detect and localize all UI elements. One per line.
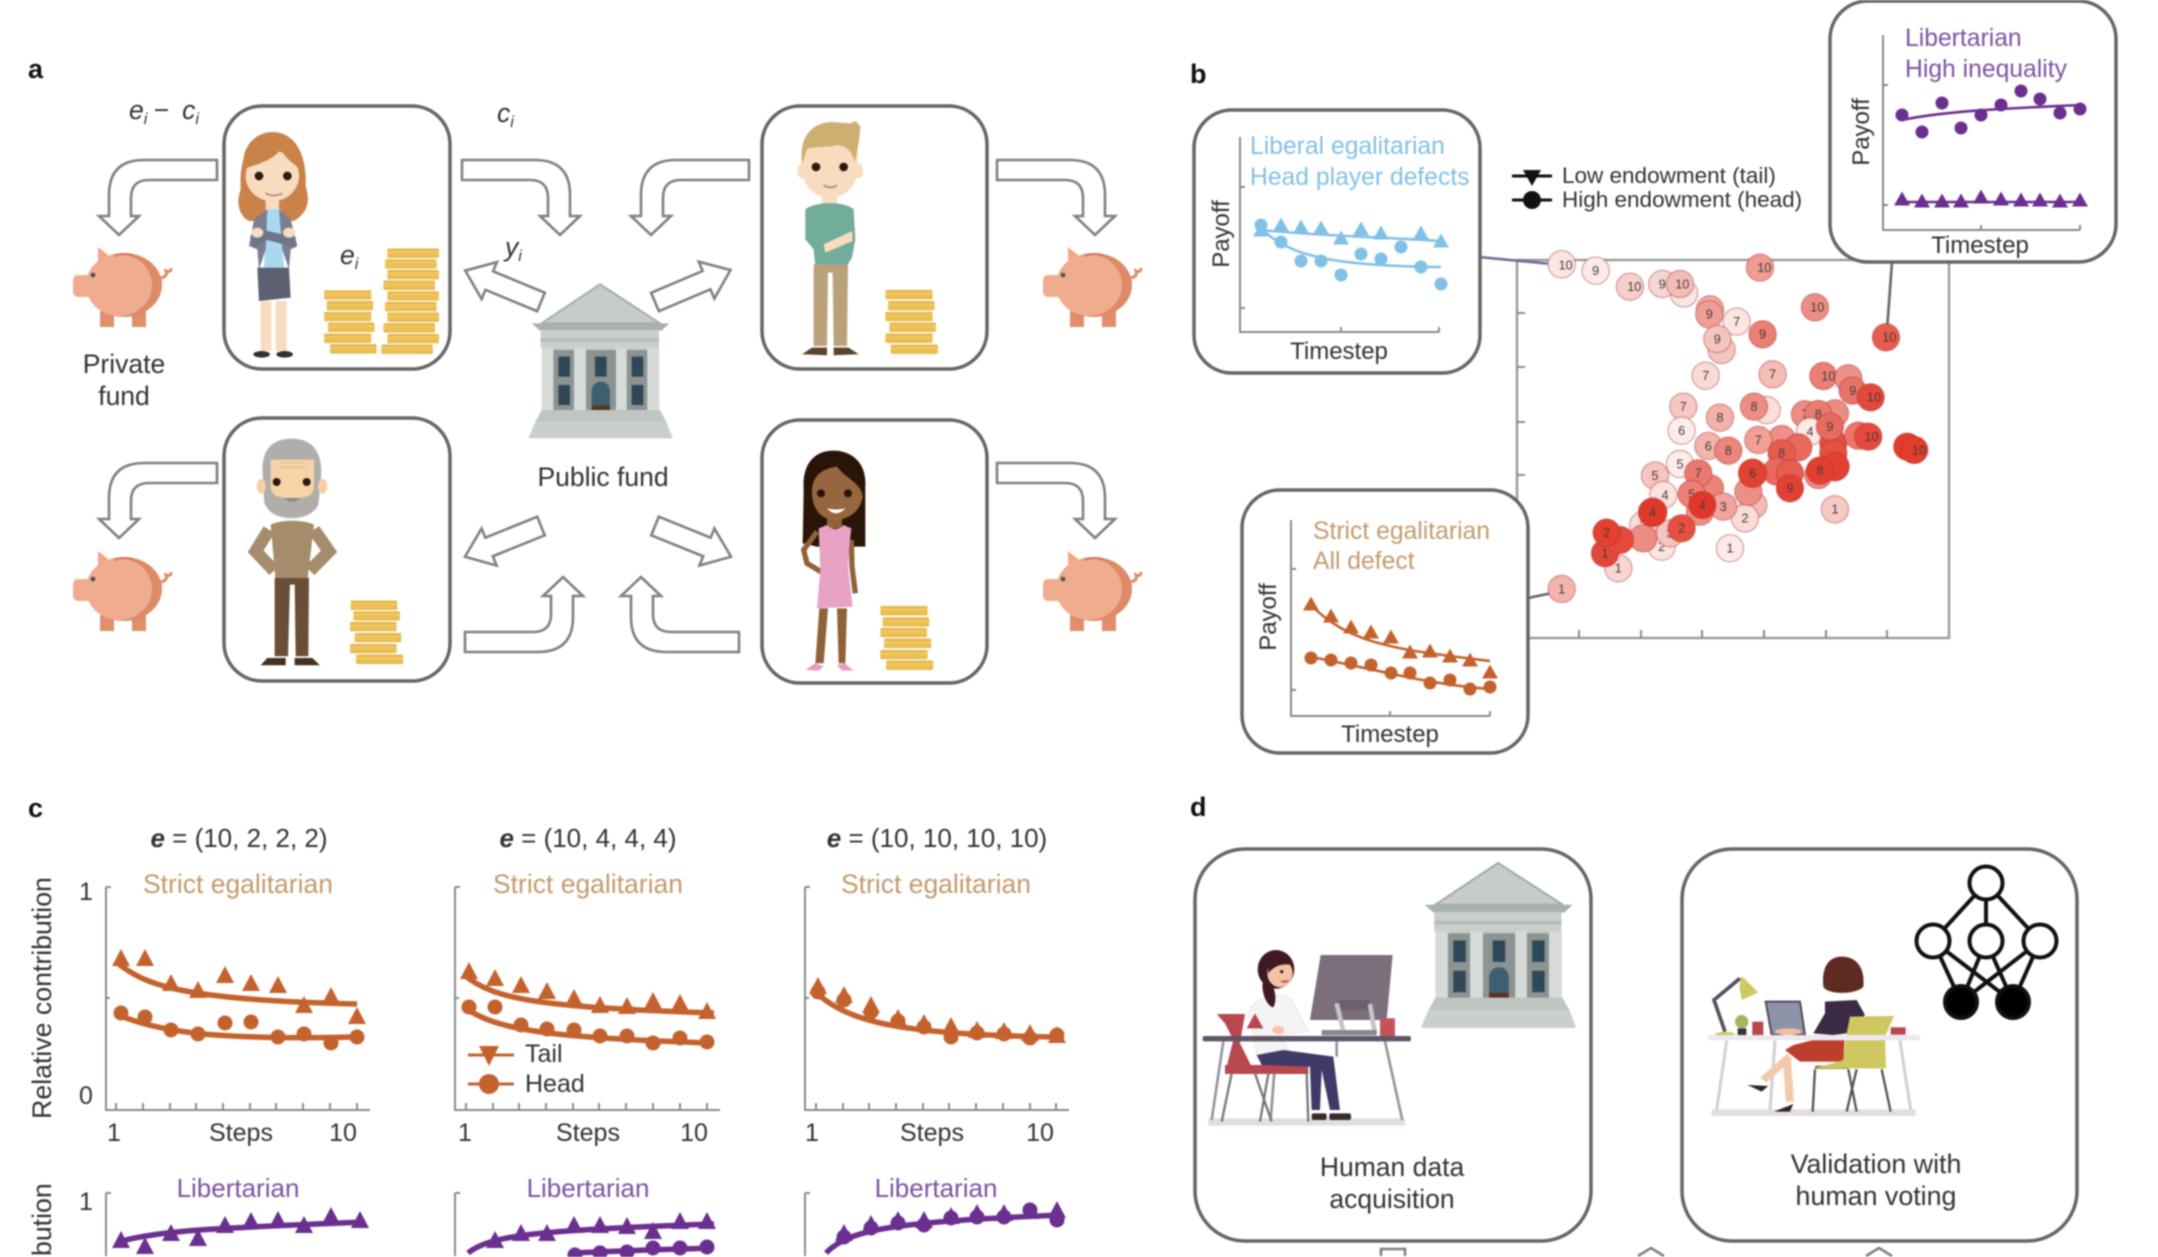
arrow: young woman to private fund [997, 463, 1115, 538]
connector lines [1479, 257, 1892, 598]
y axis label: row 2, cropped: bution [27, 1183, 57, 1256]
chart: strict egalitarian, e 10 2 2 2: Steps [209, 1119, 273, 1147]
coins: young woman [880, 606, 933, 670]
arrow: public fund to woman [458, 252, 549, 320]
scatter points: 9 [1759, 328, 1766, 342]
arrow tip: up to validation right [1866, 1248, 1892, 1256]
legend: endowment: Low endowment (tail) [1562, 163, 1776, 188]
panel d: workflow [1190, 792, 2077, 1256]
scatter points: 8 [1716, 411, 1724, 425]
inset: libertarian high inequality [1830, 1, 2116, 262]
scatter points: 6 [1678, 424, 1685, 438]
scatter points: 9 [1786, 482, 1793, 496]
icon: neural network [1916, 866, 2056, 1018]
inset: strict egalitarian all defect: Timestep [1341, 721, 1439, 748]
piggy bank: bottom left [73, 551, 171, 631]
piggy bank: top right [1043, 247, 1141, 327]
coins: woman low stack [324, 290, 377, 354]
scatter points: 4 [1806, 425, 1813, 439]
y axis label: row 1: Relative contribution [27, 877, 57, 1119]
chart: strict egalitarian, e 10 10 10 10 [805, 869, 1069, 1147]
scatter points: 7 [1801, 408, 1808, 422]
scatter points: 5 [1651, 469, 1659, 483]
legend: endowment: High endowment (head) [1562, 187, 1802, 212]
label: e minus c: i [144, 111, 148, 128]
scatter points: 2 [1678, 522, 1685, 536]
scatter points: 10 [1675, 277, 1689, 291]
chart: strict egalitarian, e 10 2 2 2 [79, 869, 370, 1147]
scatter points: 7 [1702, 369, 1709, 383]
label: e minus c: i [195, 111, 199, 128]
scatter points: 8 [1778, 447, 1785, 461]
scatter points: 1 [1831, 503, 1838, 517]
heading: a: a [28, 54, 44, 84]
chart: strict egalitarian, e 10 10 10 10: Steps [900, 1119, 964, 1147]
player box: young woman [762, 420, 987, 683]
coins: old man [350, 601, 403, 664]
inset: liberal egalitarian: Payoff [1208, 200, 1235, 268]
arrow: woman to public fund [462, 160, 580, 235]
label: e: e [340, 240, 355, 270]
scatter points: 1 [1726, 542, 1734, 556]
chart: strict egalitarian, e 10 10 10 10: 10 [1026, 1119, 1054, 1147]
scatter points: 10 [1912, 443, 1926, 457]
caption: validation with human voting: human voting [1796, 1181, 1956, 1211]
label: y: i [518, 248, 522, 265]
label: e minus c: e [129, 95, 144, 125]
caption: human data acquisition: Human data [1320, 1152, 1464, 1182]
title: e 10 2 2 2: e = (10, 2, 2, 2) [150, 823, 328, 853]
label: public fund: Public fund [537, 462, 669, 492]
arrow: public fund to old man [457, 507, 548, 575]
caption: human data acquisition: acquisition [1329, 1184, 1455, 1214]
character: woman [238, 132, 308, 358]
label: c: i [510, 114, 514, 131]
arrow: public fund to young woman [648, 507, 739, 575]
scatter points: 8 [1750, 400, 1757, 414]
chart: strict egalitarian, e 10 4 4 4 [455, 869, 720, 1147]
arrow: woman to private fund [99, 160, 217, 235]
scatter points [1548, 251, 1928, 603]
legend: endowment [1512, 163, 1802, 212]
title: e 10 4 4 4: e = (10, 4, 4, 4) [499, 823, 677, 853]
arrow: young woman to public fund [621, 577, 739, 652]
title: e 10 10 10 10: e = (10, 10, 10, 10) [827, 823, 1047, 853]
illustration: woman at computer [1203, 950, 1411, 1126]
label: y: y [505, 232, 518, 262]
scatter points: 9 [1714, 332, 1721, 346]
heading: d: d [1190, 792, 1206, 822]
chart: libertarian, e 10 2 2 2: 1 [79, 1188, 93, 1216]
chart: strict egalitarian, e 10 2 2 2: 10 [329, 1119, 357, 1147]
legend: tail and head [468, 1040, 585, 1098]
arrow: public fund to man [647, 252, 738, 320]
scatter points: 4 [1649, 506, 1656, 520]
scatter points: 9 [1659, 277, 1666, 291]
inset: libertarian high inequality: Payoff [1848, 98, 1875, 166]
inset: strict egalitarian all defect: All defect [1313, 548, 1415, 575]
scatter points: 10 [1757, 261, 1771, 275]
coins: man [885, 290, 938, 354]
scatter points: 6 [1705, 439, 1712, 453]
chart: strict egalitarian, e 10 10 10 10: 1 [805, 1119, 819, 1147]
scatter points: 10 [1865, 430, 1879, 444]
scatter points: 3 [1640, 518, 1647, 532]
scatter points: 2 [1741, 512, 1748, 526]
panel a: public goods game [28, 54, 1141, 683]
chart: strict egalitarian, e 10 2 2 2: 1 [107, 1119, 121, 1147]
scatter points: 10 [1559, 258, 1573, 272]
chart: strict egalitarian, e 10 4 4 4: Strict egalitarian [493, 869, 683, 899]
arrow: man to public fund [631, 160, 749, 235]
scatter points: 6 [1749, 467, 1756, 481]
chart: strict egalitarian, e 10 2 2 2: Strict egalitarian [143, 869, 333, 899]
scatter points: 10 [1821, 369, 1835, 383]
inset: libertarian high inequality: High inequality [1905, 56, 2068, 83]
player box: man [762, 106, 987, 369]
inset: strict egalitarian all defect: Payoff [1255, 583, 1282, 651]
chart: libertarian, e 10 10 10 10 [805, 1173, 1066, 1256]
arrow: old man to private fund [99, 463, 217, 538]
character: young woman [803, 451, 865, 671]
scatter points: 7 [1695, 467, 1702, 481]
box: validation with human voting [1682, 849, 2077, 1241]
scatter points: 5 [1676, 457, 1684, 471]
scatter points: 4 [1699, 498, 1706, 512]
inset: libertarian high inequality: Timestep [1931, 232, 2029, 259]
scatter points: 9 [1849, 384, 1856, 398]
scatter points: 4 [1661, 488, 1669, 502]
player box: woman [224, 106, 450, 369]
illustration: woman at laptop [1708, 957, 1920, 1116]
chart: libertarian, e 10 2 2 2 [79, 1173, 369, 1256]
chart: strict egalitarian, e 10 2 2 2: 1 [79, 878, 93, 906]
scatter points: 8 [1815, 407, 1822, 421]
scatter points: 10 [1810, 301, 1824, 315]
character: man [797, 121, 863, 355]
scatter points: 8 [1816, 464, 1823, 478]
scatter points: 8 [1725, 444, 1732, 458]
chart: strict egalitarian, e 10 4 4 4: 10 [680, 1119, 708, 1147]
scatter points: 7 [1733, 315, 1740, 329]
inset: liberal egalitarian: Head player defects [1250, 164, 1470, 191]
panel b: strategy scatter [1190, 1, 2116, 753]
scatter points: 10 [1882, 331, 1896, 345]
scatter points: 2 [1603, 526, 1610, 540]
label: private fund: Private [83, 349, 165, 379]
arrow: old man to public fund [465, 577, 583, 652]
inset: libertarian high inequality: Libertarian [1905, 25, 2022, 52]
scatter points: 3 [1666, 527, 1674, 541]
inset: liberal egalitarian: Liberal egalitarian [1250, 133, 1445, 160]
scatter points: 3 [1720, 500, 1727, 514]
inset: strict egalitarian all defect [1242, 490, 1528, 753]
coins: woman high stack [381, 249, 439, 354]
chart: strict egalitarian, e 10 2 2 2: 0 [79, 1082, 93, 1110]
piggy bank: top left [73, 247, 171, 327]
scatter frame [1517, 260, 1949, 638]
scatter points: 7 [1769, 368, 1776, 382]
arrow: man to private fund [997, 160, 1115, 235]
scatter points: 9 [1706, 308, 1713, 322]
panel c: relative contribution charts [27, 793, 1069, 1257]
heading: c: c [28, 793, 43, 823]
scatter points: 9 [1826, 420, 1833, 434]
scatter points: 10 [1867, 391, 1881, 405]
scatter points: 7 [1680, 400, 1687, 414]
legend: tail and head: Head [525, 1070, 585, 1098]
inset: liberal egalitarian [1194, 110, 1480, 373]
player box: old man [224, 418, 450, 681]
scatter points: 7 [1755, 433, 1762, 447]
arrow tip: up to validation left [1638, 1248, 1664, 1256]
chart: libertarian, e 10 4 4 4: Libertarian [527, 1173, 649, 1203]
arrow stub: down from acquisition [1381, 1249, 1405, 1256]
character: old man [256, 439, 329, 665]
chart: strict egalitarian, e 10 4 4 4: 1 [458, 1119, 472, 1147]
inset: liberal egalitarian: Timestep [1290, 338, 1388, 365]
chart: strict egalitarian, e 10 10 10 10: Strict egalitarian [841, 869, 1031, 899]
icon: bank [1421, 863, 1576, 1028]
chart: strict egalitarian, e 10 4 4 4: Steps [556, 1119, 620, 1147]
piggy bank: bottom right [1043, 551, 1141, 631]
label: e minus c: − [153, 95, 169, 125]
scatter points: 10 [1627, 280, 1641, 294]
scatter points: 1 [1615, 562, 1622, 576]
label: e minus c: c [175, 95, 195, 125]
scatter points: 9 [1592, 264, 1599, 278]
heading: b: b [1190, 59, 1206, 89]
chart: libertarian, e 10 4 4 4 [455, 1173, 716, 1257]
icon: bank, public fund [528, 284, 673, 438]
label: e: i [355, 256, 359, 273]
scatter points: 1 [1558, 582, 1565, 596]
box: human data acquisition [1195, 849, 1591, 1241]
legend: tail and head: Tail [525, 1040, 563, 1068]
chart: libertarian, e 10 2 2 2: Libertarian [177, 1173, 299, 1203]
scatter points: 2 [1658, 540, 1665, 554]
scatter points: 1 [1601, 547, 1609, 561]
chart: libertarian, e 10 10 10 10: Libertarian [875, 1173, 997, 1203]
caption: validation with human voting: Validation with [1791, 1149, 1961, 1179]
inset: strict egalitarian all defect: Strict egalitarian [1313, 518, 1490, 545]
scatter points: 5 [1688, 487, 1695, 501]
label: private fund: fund [98, 381, 150, 411]
label: c: c [497, 98, 510, 128]
